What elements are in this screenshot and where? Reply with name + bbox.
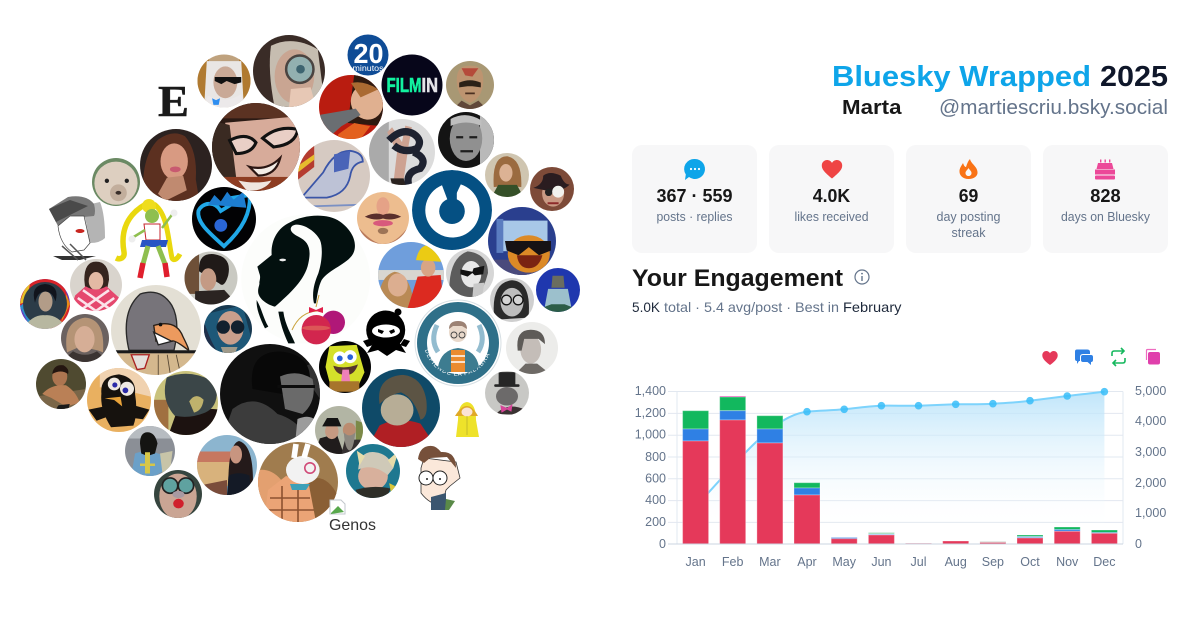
- right axis labels: 3,000: [1135, 445, 1166, 459]
- cumulative area: [696, 392, 1104, 544]
- month labels: Jun: [871, 555, 892, 569]
- month labels: Jan: [686, 555, 706, 569]
- avatar: comic woman with glasses: [212, 103, 304, 191]
- engagement summary: February: [843, 299, 902, 315]
- month labels: Sep: [982, 555, 1004, 569]
- icon: likes heart: [1042, 351, 1058, 365]
- stat card: likes received: likes received: [794, 210, 869, 224]
- stat card: day posting streak: streak: [952, 226, 986, 240]
- avatar cluster: [20, 34, 580, 534]
- avatar: christmas ornaments: [292, 295, 345, 344]
- left axis labels: 800: [645, 450, 666, 464]
- avatar: curly blonde woman: [61, 314, 109, 362]
- right axis labels: 4,000: [1135, 414, 1166, 428]
- line markers: [803, 388, 1108, 416]
- avatar: yellow hat couple: [378, 242, 444, 308]
- avatar: long blonde hair man: [485, 153, 529, 197]
- avatar: Diaspora-style blue logo: [412, 170, 492, 250]
- bar: Jan: [683, 411, 709, 544]
- avatar: old man with magnifier: [253, 35, 325, 107]
- avatar: Filmin logo: IN: [422, 75, 438, 97]
- right axis labels: 2,000: [1135, 476, 1166, 490]
- avatar: short-haired woman sketch: [506, 322, 558, 374]
- avatar: mustache face: [357, 192, 409, 244]
- cumulative line: [696, 392, 1104, 507]
- avatar: Filmin logo: [382, 54, 442, 116]
- avatar: El Espanol E logo: E: [158, 77, 189, 126]
- avatar: El Espanol E logo: [148, 77, 198, 127]
- month labels: Oct: [1020, 555, 1040, 569]
- icon: chat bubble: [684, 159, 705, 180]
- avatar: woman in pink scarf: [70, 259, 122, 311]
- stat card: likes received: [769, 145, 894, 253]
- avatar: painted long hair figure: [154, 371, 218, 435]
- avatar: yellow raincoat doll: [455, 402, 479, 437]
- avatar: Defiende la Palabra badge: [375, 300, 516, 426]
- avatar: woman on a balcony: [197, 435, 257, 495]
- bar: Feb: [720, 396, 746, 544]
- avatar: helmeted old man illustration: [446, 61, 494, 109]
- icon: info: [855, 270, 869, 284]
- display name: Marta: [842, 97, 902, 119]
- month labels: Feb: [722, 555, 744, 569]
- icon: quotes squares: [1146, 350, 1160, 364]
- broken image alt text: Genos: [329, 517, 376, 534]
- avatar: cartoon rabbit in plaid: [258, 442, 338, 522]
- avatar: hand with snake: [369, 119, 435, 185]
- avatar: blonde in sunglasses bw: [446, 249, 494, 297]
- bar: Sep: [980, 542, 1006, 544]
- stat card: days on Bluesky: [1043, 145, 1168, 253]
- month labels: Jul: [911, 555, 926, 569]
- avatar: 20 minutos logo: [348, 34, 388, 76]
- engagement summary: 5.0K: [632, 299, 661, 315]
- stacked bars: [683, 396, 1117, 544]
- avatar: red background with gun: [319, 75, 388, 139]
- left axis labels: 0: [659, 537, 666, 551]
- bar: Aug: [943, 541, 969, 544]
- icon: reposts arrows: [1112, 348, 1125, 366]
- left axis labels: 1,200: [635, 406, 666, 420]
- avatar: cartoon bird with Athletic crest: [111, 285, 201, 375]
- avatar: alpaca: [92, 158, 140, 206]
- bar: Jun: [868, 532, 894, 544]
- avatar: woman kissing with glasses: [154, 470, 202, 519]
- avatar: cartoon man with glasses: [418, 446, 460, 510]
- bar: Mar: [757, 416, 783, 544]
- bar: May: [831, 538, 857, 544]
- month labels: Apr: [797, 555, 817, 569]
- avatar: ninja icon: [363, 308, 410, 356]
- avatar: retro cartoon girl: [49, 195, 105, 260]
- avatar: black and white man: [220, 344, 320, 444]
- bar: Dec: [1091, 530, 1117, 544]
- month labels: Mar: [759, 555, 781, 569]
- icon: replies bubbles: [1075, 350, 1093, 365]
- stat card: day posting streak: 69: [959, 185, 978, 206]
- avatar: shirtless boy: [36, 359, 86, 409]
- avatar: Anthony Hopkins portrait: [438, 112, 494, 168]
- icon: heart: [822, 160, 842, 178]
- left axis labels: 400: [645, 493, 666, 507]
- month labels: Nov: [1056, 555, 1079, 569]
- avatar: woman in black hat: [530, 167, 574, 211]
- avatar: Darth Vader man: [125, 426, 175, 476]
- month labels: Dec: [1093, 555, 1116, 569]
- avatar: top hat cat: [485, 371, 529, 415]
- avatar: question mark silhouette: [241, 214, 370, 344]
- avatar: spongebob: [319, 341, 371, 393]
- stat card: day posting streak: [906, 145, 1031, 253]
- month labels: May: [832, 555, 857, 569]
- avatar: two men with beards: [315, 406, 363, 454]
- bar: Jul: [906, 543, 932, 544]
- stat card: likes received: 4.0K: [813, 185, 851, 206]
- avatar: dark curly-haired woman: [184, 252, 238, 304]
- broken image icon: [330, 500, 345, 514]
- avatar: sunglasses man: [198, 54, 250, 108]
- heading: Your Engagement: Your Engagement: [632, 265, 843, 292]
- icon: flame: [959, 159, 978, 179]
- legend icons: [1042, 348, 1160, 366]
- avatar: blue ink sparrow: [298, 140, 370, 212]
- avatar: baby in viking hat: [346, 444, 400, 498]
- avatar: blue robot: [536, 268, 580, 312]
- avatar: brunette woman: [140, 129, 212, 201]
- stat card: posts and replies: posts · replies: [656, 210, 732, 224]
- engagement summary: [632, 299, 902, 315]
- stat card: day posting streak: day posting: [936, 210, 1001, 224]
- handle: @martiescriu.bsky.social: [939, 97, 1168, 119]
- stat card: posts and replies: 367 · 559: [656, 185, 732, 206]
- avatar: woman with glasses bw: [490, 278, 534, 322]
- month labels: [686, 555, 1116, 569]
- title: Bluesky Wrapped: [832, 61, 1091, 93]
- avatar: 20 minutos logo: 20: [354, 38, 384, 69]
- left axis labels: 1,000: [635, 428, 666, 442]
- avatar: blue flame heart: [192, 187, 256, 251]
- right axis labels: 1,000: [1135, 506, 1166, 520]
- avatar: Calimero chick: [87, 368, 151, 432]
- month labels: Aug: [945, 555, 967, 569]
- bar: Nov: [1054, 527, 1080, 544]
- bar: Apr: [794, 483, 820, 544]
- right axis labels: 0: [1135, 537, 1142, 551]
- avatar: 20 minutos logo: minutos: [352, 63, 384, 73]
- stat card: days on Bluesky: days on Bluesky: [1061, 210, 1151, 224]
- combo chart: monthly engagement: [635, 384, 1166, 569]
- left axis labels: [635, 384, 666, 551]
- engagement summary: total · 5.4 avg/post · Best in: [664, 299, 839, 315]
- left axis labels: 1,400: [635, 384, 666, 398]
- left axis labels: 200: [645, 515, 666, 529]
- right axis labels: 5,000: [1135, 384, 1166, 398]
- stat card: days on Bluesky: 828: [1090, 185, 1121, 206]
- avatar: sailor moon: [116, 199, 180, 278]
- left axis labels: 600: [645, 472, 666, 486]
- title: 2025: [1100, 61, 1168, 93]
- avatar: woman with blue glasses: [204, 305, 252, 353]
- avatar: rainbow ring portrait: [20, 279, 70, 329]
- right axis labels: [1135, 384, 1166, 551]
- bar: Oct: [1017, 535, 1043, 544]
- avatar: painted red child: [362, 369, 440, 447]
- avatar: Filmin logo: FILM: [386, 75, 422, 97]
- icon: cake: [1095, 160, 1115, 180]
- stat card: posts and replies: [632, 145, 757, 253]
- avatar: sunglasses cookie emoji: [488, 207, 556, 275]
